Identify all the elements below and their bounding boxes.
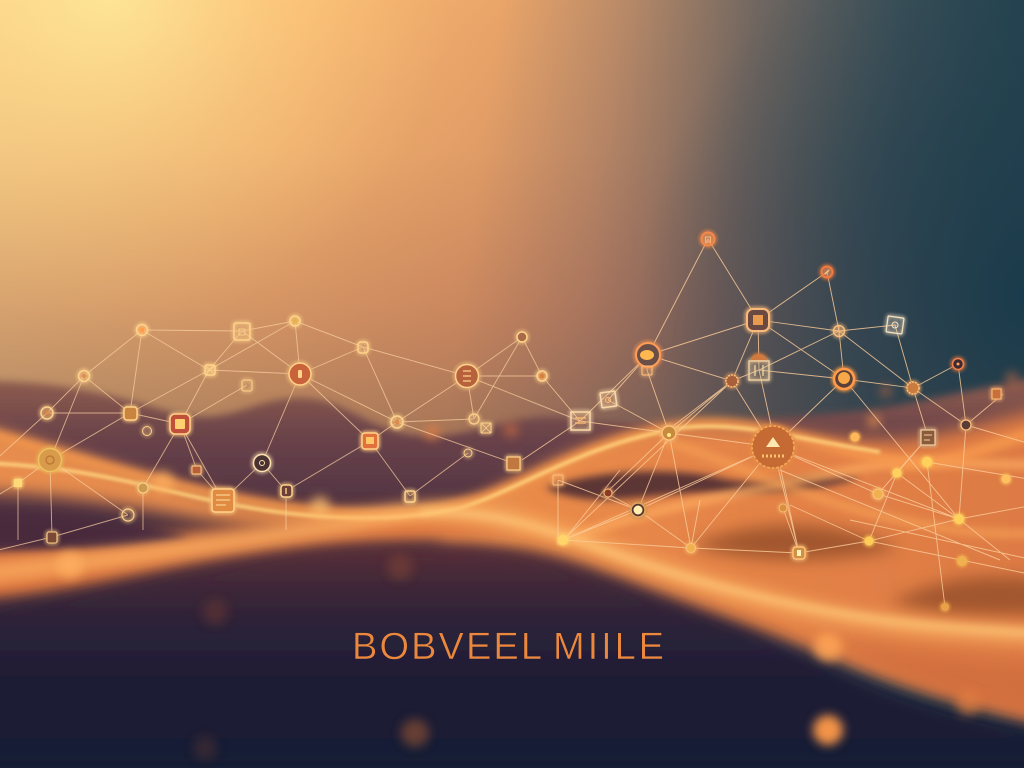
node icon: camera [124,407,137,420]
node icon: soft dot 8 [957,556,967,566]
node icon: small card behind hub [642,366,652,375]
ribbon: right mid streaks [560,462,1024,542]
bokeh light spots [57,372,1018,760]
network nodes: left cluster [14,316,547,543]
node icon: glowing dot 5 [892,468,902,478]
node icon: small card [507,457,520,470]
node icon: dot [290,316,300,326]
node icon: small cross square [481,423,491,433]
ribbon: dark centre-right pocket [545,471,860,500]
title wordmark [352,626,664,668]
node icon: figure [793,547,805,559]
node icon: glowing dot 2 [864,536,874,546]
node icon: faint square [553,475,563,485]
node icon: large glowing hub [38,448,62,472]
node icon: soft dot 9 [1002,474,1010,484]
node icon: sparkle dot [907,382,919,394]
node icon: phone [281,485,292,497]
node icon: page [242,380,252,391]
node icon: hex [391,416,403,428]
node icon: red target [952,358,964,370]
node icon: speech hub [636,343,660,367]
node icon: small dot 6 [873,489,883,499]
ribbon: lower bright sweep [0,512,1024,640]
ribbon: upper left soft band [0,418,520,542]
node icon: glowing dot 3 [954,514,964,524]
node icon: checklist [571,412,590,430]
title wordmark: MIILE [553,626,664,668]
node icon: low square [47,532,57,543]
node icon: glowing dot 4 [922,457,932,467]
node icon: bank [749,354,769,380]
node icon: chat square [886,316,904,334]
node icon: orange hub [834,369,854,389]
node icon: small wheel [833,325,845,337]
ribbon: right wide band [440,400,1024,740]
node icon: green dot [138,483,148,493]
node icon: yellow square [14,479,22,487]
ribbon: upper streak [0,420,1024,515]
node icon: ring [358,342,368,353]
lower right orange veil [830,640,1024,725]
node icon: people ring [254,454,270,472]
network connection lines: right cluster [522,239,1024,607]
node icon: bright white dot [631,503,645,517]
node icon: filled dot [537,371,547,381]
ribbon: lower left soft band [0,514,520,602]
ribbon: dark left pocket [0,512,190,550]
network nodes: right cluster [553,232,1010,611]
node icon: small dot 7 [779,504,787,512]
glowing orange ribbons [0,400,1024,740]
node icon: folder [362,433,378,449]
node icon: small ring [517,332,527,342]
node icon: faint ring [142,426,152,436]
node icon: message square [600,391,617,408]
node icon: glowing dot [558,535,568,545]
dark foreground hill [0,544,1024,768]
ribbon: bright core streak [0,426,880,518]
node icon: form square [921,430,935,445]
ribbon: right mid streak 2 [660,440,1024,534]
node icon: cross [205,365,215,375]
node icon: crossed dot [726,375,738,387]
node icon: star [78,370,90,382]
node icon: small ember square [992,389,1001,399]
node icon: soft dot 11 [941,603,949,611]
node icon: red square hub [170,414,190,434]
node icon: square hub [747,309,769,331]
node icon: faint block [192,466,201,474]
node icon: bright hub [662,426,676,440]
node icon: tiny ring [686,544,696,552]
node icon: ring right [961,420,971,430]
title wordmark: BOBVEEL [352,626,542,668]
node icon: crescent [41,407,53,419]
node icon: small circle [469,414,479,424]
network connection lines: left cluster [0,321,580,552]
node icon: ring low [122,509,134,521]
node icon: document [212,489,234,512]
node icon: large hub [289,363,311,385]
node icon: small square [405,491,415,502]
distant hills [0,370,1024,640]
node icon: grid card [234,323,250,340]
node icon: dark ember ring [604,489,612,497]
node icon: pin [136,324,148,336]
node icon: lock [702,232,714,246]
ribbon: brown lower-right pockets [690,525,1024,615]
node icon: faint ring 2 [464,449,472,457]
node icon: soft dot 10 [850,432,860,442]
node icon: large triangle hub [752,426,794,468]
ribbon: lower sweep core [420,512,1024,636]
node icon: large hub with glyph [456,364,478,388]
node icon: tag [822,266,832,278]
